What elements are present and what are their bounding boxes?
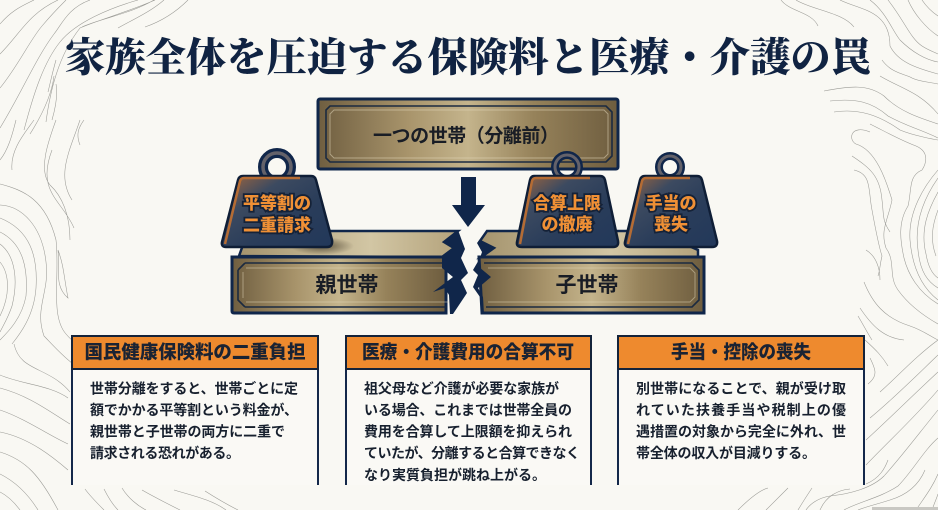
panel: loss of allowances and deductions	[618, 336, 864, 485]
weight: flat-rate double charge	[222, 153, 332, 247]
panel body text: 親世帯と子世帯の両方に二重で	[90, 424, 285, 440]
contact shadow under left weight	[290, 237, 354, 255]
panel body text: 祖父母など介護が必要な家族が	[364, 380, 559, 396]
weight: abolished combined cap: の撤廃	[542, 214, 592, 234]
weight label: 平等割の	[243, 193, 311, 213]
title: 家族全体を圧迫する保険料と医療・介護の罠	[65, 35, 871, 80]
panel body text: 世帯分離をすると、世帯ごとに定	[90, 380, 298, 396]
right slab: child household	[473, 230, 704, 314]
weight: abolished combined cap	[517, 155, 618, 247]
top plate: one household before separation	[318, 99, 618, 169]
panel heading: 医療・介護費用の合算不可	[362, 342, 574, 362]
weight label: 合算上限	[533, 193, 601, 213]
panel body text: 額でかかる平等割という料金が、	[90, 402, 298, 418]
weight: loss of allowance: 喪失	[654, 214, 688, 234]
panel body text: いる場合、これまでは世帯全員の	[364, 402, 572, 418]
panel body text: 別世帯になることで、親が受け取	[636, 380, 846, 396]
panel: medical and care costs cannot be combined	[346, 336, 591, 485]
weight: flat-rate double charge: 二重請求	[243, 215, 311, 235]
crack edge left	[433, 230, 468, 314]
slab label: 親世帯	[316, 274, 378, 297]
bottom-right grey fragment	[872, 507, 938, 510]
panel body text: なり実質負担が跳ね上がる。	[364, 467, 546, 483]
panel body text: 遇措置の対象から完全に外れ、世	[636, 424, 846, 440]
left slab: parent household	[232, 230, 468, 314]
plate label: 一つの世帯（分離前）	[373, 125, 559, 147]
panel body text: 帯全体の収入が目減りする。	[636, 445, 816, 461]
panel body text	[364, 380, 580, 483]
weight label: 手当の	[646, 193, 696, 213]
panel heading: 国民健康保険料の二重負担	[84, 342, 306, 362]
panel body text: 費用を合算して上限額を抑えられ	[364, 424, 572, 440]
arrow: separation	[452, 177, 485, 227]
panel body text	[90, 380, 298, 461]
panel body text: 請求される恐れがある。	[90, 445, 240, 461]
panel: national health insurance double burden	[72, 336, 318, 485]
panel body text	[636, 380, 846, 461]
panel heading: 手当・控除の喪失	[671, 342, 811, 362]
panel body text: れていた扶養手当や税制上の優	[636, 402, 846, 418]
slab label: 子世帯	[556, 274, 618, 297]
weight: loss of allowance	[625, 156, 717, 247]
crack edge right	[473, 230, 494, 314]
panel body text: ていたが、分離すると合算できなく	[364, 445, 580, 461]
